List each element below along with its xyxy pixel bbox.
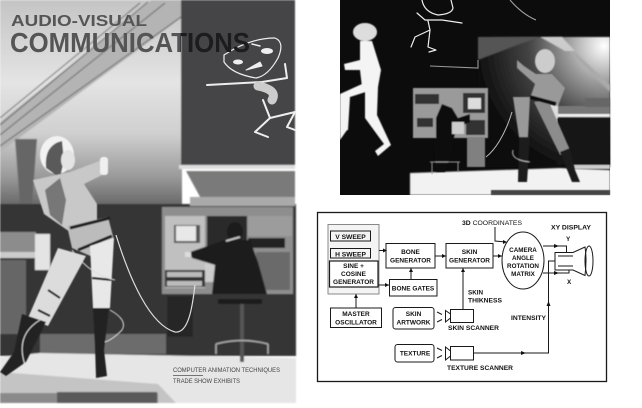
master oscillator <box>330 308 382 328</box>
floor band <box>40 334 166 354</box>
texture scanner <box>437 346 513 372</box>
left desk <box>0 232 50 334</box>
skin scanner <box>437 310 499 332</box>
camera angle rotation matrix: MATRIX <box>511 271 536 278</box>
cable <box>486 112 512 157</box>
cable <box>116 235 195 332</box>
skin artwork: ARTWORK <box>397 320 431 326</box>
master oscillator: MASTER <box>342 311 370 318</box>
floor <box>410 168 610 195</box>
bone gates <box>390 280 437 296</box>
console <box>413 88 488 174</box>
cover wall <box>0 0 182 206</box>
camera angle rotation matrix: ANGLE <box>512 255 534 262</box>
performer <box>513 49 580 182</box>
panel: magazine cover photo <box>0 0 296 403</box>
lit wall <box>478 37 610 167</box>
bone generator: GENERATOR <box>390 258 431 264</box>
camera angle rotation matrix: ROTATION <box>507 263 539 270</box>
skin generator: GENERATOR <box>449 258 490 264</box>
V SWEEP, H SWEEP and sine generator group <box>328 224 379 294</box>
skin artwork: SKIN <box>406 311 422 318</box>
cover caption <box>173 367 280 385</box>
labels: XY DISPLAY <box>551 224 592 232</box>
screen stick figure <box>207 38 295 137</box>
dark studio background <box>0 204 296 356</box>
labels: INTENSITY <box>511 315 547 322</box>
operator <box>185 222 267 294</box>
screen <box>181 0 295 165</box>
cover caption: COMPUTER ANIMATION TECHNIQUES <box>173 367 280 374</box>
cover title: AUDIO-VISUAL <box>11 13 147 30</box>
skin artwork <box>393 308 434 329</box>
stool <box>216 299 268 362</box>
labels: THIKNESS <box>468 298 502 304</box>
texture scanner: TEXTURE SCANNER <box>447 365 513 372</box>
V SWEEP, H SWEEP and sine generator group: V SWEEP <box>335 234 366 241</box>
XY display CRT <box>555 246 593 276</box>
labels <box>462 220 592 322</box>
texture <box>395 344 434 362</box>
small white figure <box>411 0 462 52</box>
chimney <box>15 139 37 204</box>
right equipment <box>550 98 610 169</box>
bone generator <box>386 244 435 268</box>
cover title: COMMUNICATIONS <box>10 27 250 58</box>
diagram frame <box>318 212 606 382</box>
skin generator: SKIN <box>462 249 478 256</box>
labels: SKIN <box>468 290 483 296</box>
camera angle rotation matrix <box>502 232 544 289</box>
arc on screen <box>510 0 536 20</box>
texture: TEXTURE <box>400 350 431 358</box>
bone gates: BONE GATES <box>392 286 435 292</box>
skin scanner: SKIN SCANNER <box>448 325 499 332</box>
platform <box>0 372 176 403</box>
bone generator: BONE <box>401 249 421 256</box>
labels: Y <box>566 236 571 243</box>
V SWEEP, H SWEEP and sine generator group: COSINE <box>341 271 367 278</box>
ceiling beam <box>0 0 181 152</box>
skin generator <box>446 244 493 268</box>
large white figure <box>340 23 391 156</box>
performer <box>0 136 124 378</box>
camera angle rotation matrix: CAMERA <box>509 247 537 254</box>
floor <box>0 353 296 403</box>
labels: X <box>567 279 572 286</box>
V SWEEP, H SWEEP and sine generator group: SINE + <box>343 263 364 270</box>
cover caption: TRADE SHOW EXHIBITS <box>173 378 240 385</box>
cover title <box>10 13 250 58</box>
master oscillator: OSCILLATOR <box>335 320 377 326</box>
control console <box>162 207 293 337</box>
panel: studio photo <box>340 0 610 195</box>
panel: block diagram <box>318 212 606 382</box>
labels: 3D COORDINATES <box>462 220 522 227</box>
V SWEEP, H SWEEP and sine generator group: GENERATOR <box>333 279 374 286</box>
V SWEEP, H SWEEP and sine generator group: H SWEEP <box>335 252 366 258</box>
arrows <box>354 227 569 355</box>
